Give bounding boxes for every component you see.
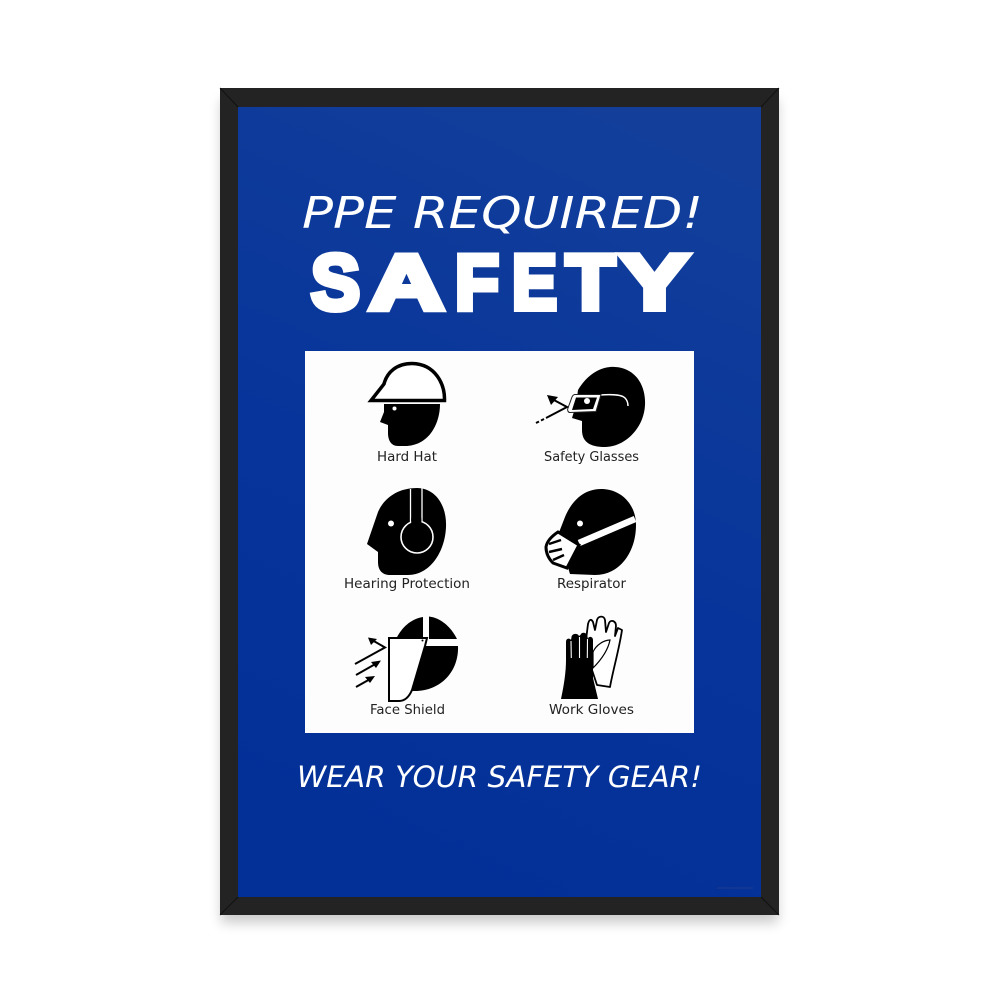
icon: hearing protection	[367, 488, 446, 575]
icon: work gloves	[561, 617, 622, 699]
label: Work Gloves: Work Gloves	[549, 702, 634, 718]
heading: SAFETY: Y	[620, 238, 689, 326]
heading: SAFETY: T	[566, 238, 615, 326]
heading: SAFETY: F	[455, 238, 499, 326]
footer slogan: WEAR YOUR SAFETY GEAR!	[297, 760, 702, 794]
frame shadow	[221, 100, 778, 923]
icon: respirator	[546, 489, 636, 575]
icon: face shield	[355, 616, 458, 701]
label: Safety Glasses: Safety Glasses	[544, 449, 639, 465]
label: Hard Hat: Hard Hat	[377, 449, 437, 465]
blue poster background	[238, 107, 761, 897]
panel: PPE icons	[305, 351, 694, 733]
label: Respirator: Respirator	[557, 576, 626, 592]
label: Face Shield: Face Shield	[370, 702, 445, 718]
icon: hard hat	[371, 364, 445, 446]
poster frame	[220, 88, 779, 915]
heading: SAFETY: A	[369, 238, 444, 326]
icon: safety glasses	[536, 367, 645, 447]
heading: SAFETY: E	[512, 238, 557, 326]
heading: PPE required: PPE REQUIRED!	[302, 188, 703, 239]
label: Hearing Protection: Hearing Protection	[344, 576, 470, 592]
heading: SAFETY: S	[311, 238, 360, 326]
